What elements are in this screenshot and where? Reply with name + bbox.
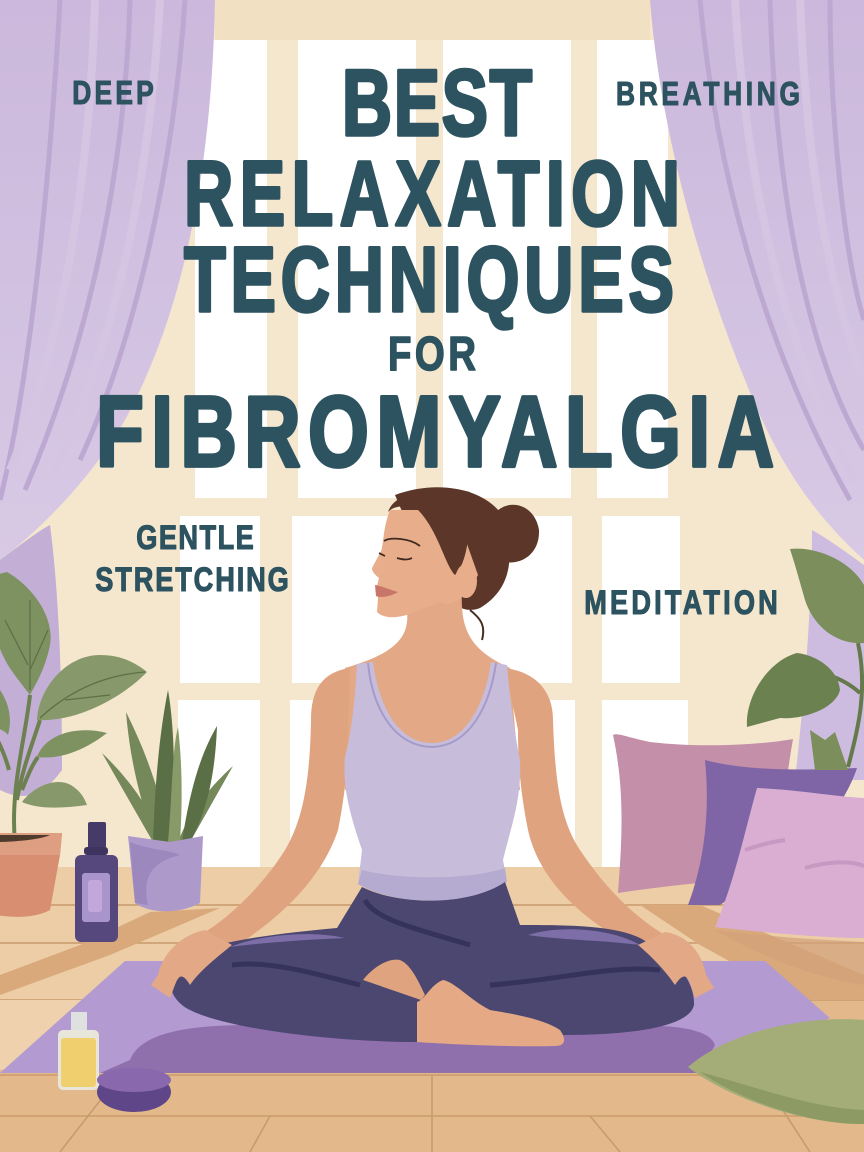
face — [372, 510, 478, 617]
tank neckline trim — [368, 663, 496, 747]
plant: monstera — [747, 549, 864, 770]
leggings — [170, 882, 694, 1042]
left hand — [151, 930, 232, 998]
lips — [375, 585, 398, 597]
icon: essential oil bottle — [75, 822, 118, 942]
icon: oil jar — [58, 1012, 99, 1090]
title: FOR — [388, 328, 476, 381]
label: gentle stretching: STRETCHING — [95, 560, 289, 599]
leggings highlights — [230, 929, 640, 947]
label: deep: DEEP — [72, 75, 154, 112]
facial features — [379, 539, 420, 560]
front foot — [417, 980, 564, 1046]
plant: snake plant — [102, 690, 233, 911]
plant: left pot — [0, 572, 147, 917]
yoga mat — [0, 961, 830, 1073]
leggings folds — [232, 900, 660, 985]
title: RELAXATION — [184, 143, 680, 245]
title: BEST — [342, 50, 532, 155]
title: TECHNIQUES — [184, 229, 674, 331]
tank lower shading — [358, 868, 507, 901]
mat shadow — [100, 1025, 715, 1073]
back foot — [363, 960, 425, 1000]
ear — [455, 564, 477, 598]
title — [96, 50, 774, 488]
tank top — [344, 662, 520, 901]
right arm — [505, 668, 665, 950]
woman — [151, 487, 714, 1046]
left curtain — [0, 0, 215, 796]
wall background — [0, 0, 864, 880]
label: meditation: MEDITATION — [584, 583, 778, 622]
cushions — [613, 734, 864, 985]
hair back — [395, 487, 510, 610]
label: gentle stretching: GENTLE — [136, 518, 254, 557]
label: breathing: BREATHING — [616, 76, 800, 113]
torso skin — [345, 590, 520, 790]
green cushion — [688, 1019, 864, 1124]
window — [178, 0, 688, 867]
hair front — [388, 489, 470, 575]
label: gentle stretching — [95, 518, 289, 599]
right curtain — [650, 0, 864, 780]
floor — [0, 867, 864, 1152]
title: FIBROMYALGIA — [96, 377, 774, 488]
left arm — [205, 668, 350, 950]
right hand — [638, 932, 714, 998]
hair bun — [495, 505, 539, 563]
icon: candle tin — [97, 1068, 171, 1112]
hair wisp — [470, 610, 483, 640]
